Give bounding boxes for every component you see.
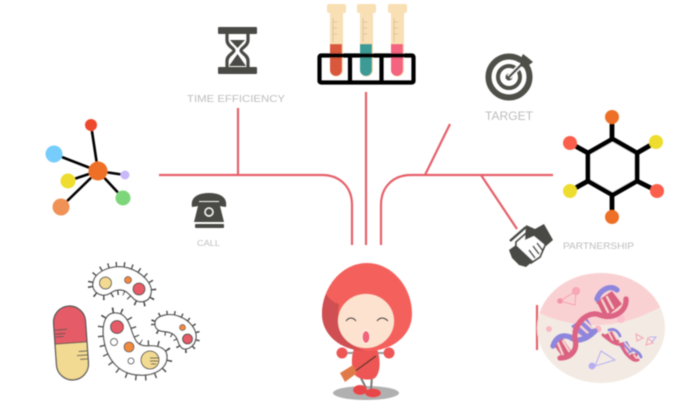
icon: telephone bbox=[192, 193, 226, 228]
small molecule shapes bbox=[546, 288, 653, 345]
icon: network of coloured nodes bbox=[46, 119, 130, 216]
icon: test tubes in rack bbox=[320, 4, 414, 83]
label: call: CALL bbox=[197, 238, 220, 248]
label: time efficiency: TIME EFFICIENCY bbox=[187, 93, 285, 105]
arms and hands bbox=[336, 348, 394, 358]
face bbox=[338, 294, 394, 348]
mouth bbox=[362, 330, 370, 344]
illustration: bacterium right bbox=[155, 315, 196, 349]
label: target: TARGET bbox=[485, 111, 533, 123]
connector lines bbox=[159, 92, 553, 350]
hood bbox=[322, 263, 412, 351]
eyes bbox=[346, 318, 388, 321]
shadow bbox=[333, 386, 399, 400]
legs bbox=[360, 376, 372, 390]
illustration: DNA circle bbox=[535, 270, 670, 386]
illustration: bacterium top bbox=[93, 267, 151, 302]
large helix bbox=[553, 288, 626, 358]
illustration: pill bbox=[52, 305, 90, 381]
illustration: bacterium large bbox=[103, 313, 167, 375]
illustration: red hooded character bbox=[322, 263, 412, 400]
icon: target bbox=[488, 54, 533, 98]
icon: handshake bbox=[509, 224, 553, 267]
bag and strap bbox=[340, 356, 376, 382]
small helix bbox=[603, 329, 641, 362]
shoes bbox=[353, 385, 381, 398]
icon: hexagon molecule bbox=[563, 110, 664, 224]
label: partnership: PARTNERSHIP bbox=[563, 241, 634, 252]
icon: hourglass bbox=[218, 27, 257, 74]
body bbox=[352, 346, 380, 380]
